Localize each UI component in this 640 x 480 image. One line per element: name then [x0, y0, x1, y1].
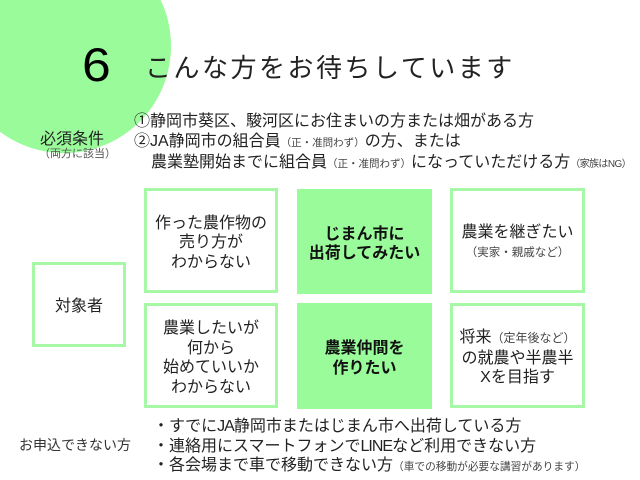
box: selling crops: 作った農作物の: [155, 215, 267, 232]
box: farming friends: 農業仲間を: [324, 340, 404, 357]
box: future farming: 将来（定年後など）: [459, 329, 576, 346]
box: ship to Jiman-ichi: [297, 189, 432, 294]
box: succeed farm: 農業を継ぎたい: [461, 224, 574, 241]
box: how to begin: 何から: [187, 340, 235, 356]
box: farming friends: 作りたい: [332, 360, 396, 376]
box: succeed farm: [450, 188, 585, 293]
required conditions text: ①静岡市葵区、駿河区にお住まいの方または畑がある方: [134, 113, 534, 130]
box: selling crops: わからない: [171, 254, 251, 271]
box: future farming: Xを目指す: [480, 369, 555, 386]
required conditions text: 農業塾開始までに組合員（正・准問わず）になっていただける方（家族はNG）: [151, 154, 631, 171]
section number: 6: [82, 38, 111, 91]
label: required conditions: [39, 130, 116, 160]
required conditions text: ②JA静岡市の組合員（正・准問わず）の方、または: [134, 132, 461, 150]
label: required conditions: （両方に該当）: [39, 148, 116, 160]
title: こんな方をお待ちしています: [145, 53, 515, 83]
box: how to begin: 始めていいか: [163, 359, 259, 376]
decorative green circle: [0, 0, 171, 153]
box: future farming: [450, 303, 585, 408]
box: how to begin: 農業したいが: [163, 320, 259, 337]
not eligible list: ・各会場まで車で移動できない方（車での移動が必要な講習があります）: [153, 457, 585, 474]
box: how to begin: わからない: [171, 378, 251, 396]
not eligible list: [153, 417, 585, 474]
not eligible list: ・すでにJA静岡市またはじまん市へ出荷している方: [153, 418, 521, 435]
label box: target audience: [32, 262, 126, 347]
box: farming friends: [297, 303, 432, 409]
box: selling crops: 売り方が: [179, 234, 243, 251]
label: required conditions: 必須条件: [40, 131, 104, 148]
label box: target audience: 対象者: [55, 298, 103, 315]
box: selling crops: [144, 188, 278, 293]
box: ship to Jiman-ichi: 出荷してみたい: [309, 245, 420, 262]
box: succeed farm: （実家・親戚など）: [466, 247, 569, 259]
required conditions text: [134, 112, 631, 171]
not eligible list: ・連絡用にスマートフォンでLINEなど利用できない方: [153, 438, 536, 454]
box: future farming: の就農や半農半: [461, 350, 574, 367]
box: ship to Jiman-ichi: じまん市に: [324, 226, 404, 242]
label: not eligible: お申込できない方: [19, 437, 131, 453]
box: how to begin: [144, 303, 278, 408]
